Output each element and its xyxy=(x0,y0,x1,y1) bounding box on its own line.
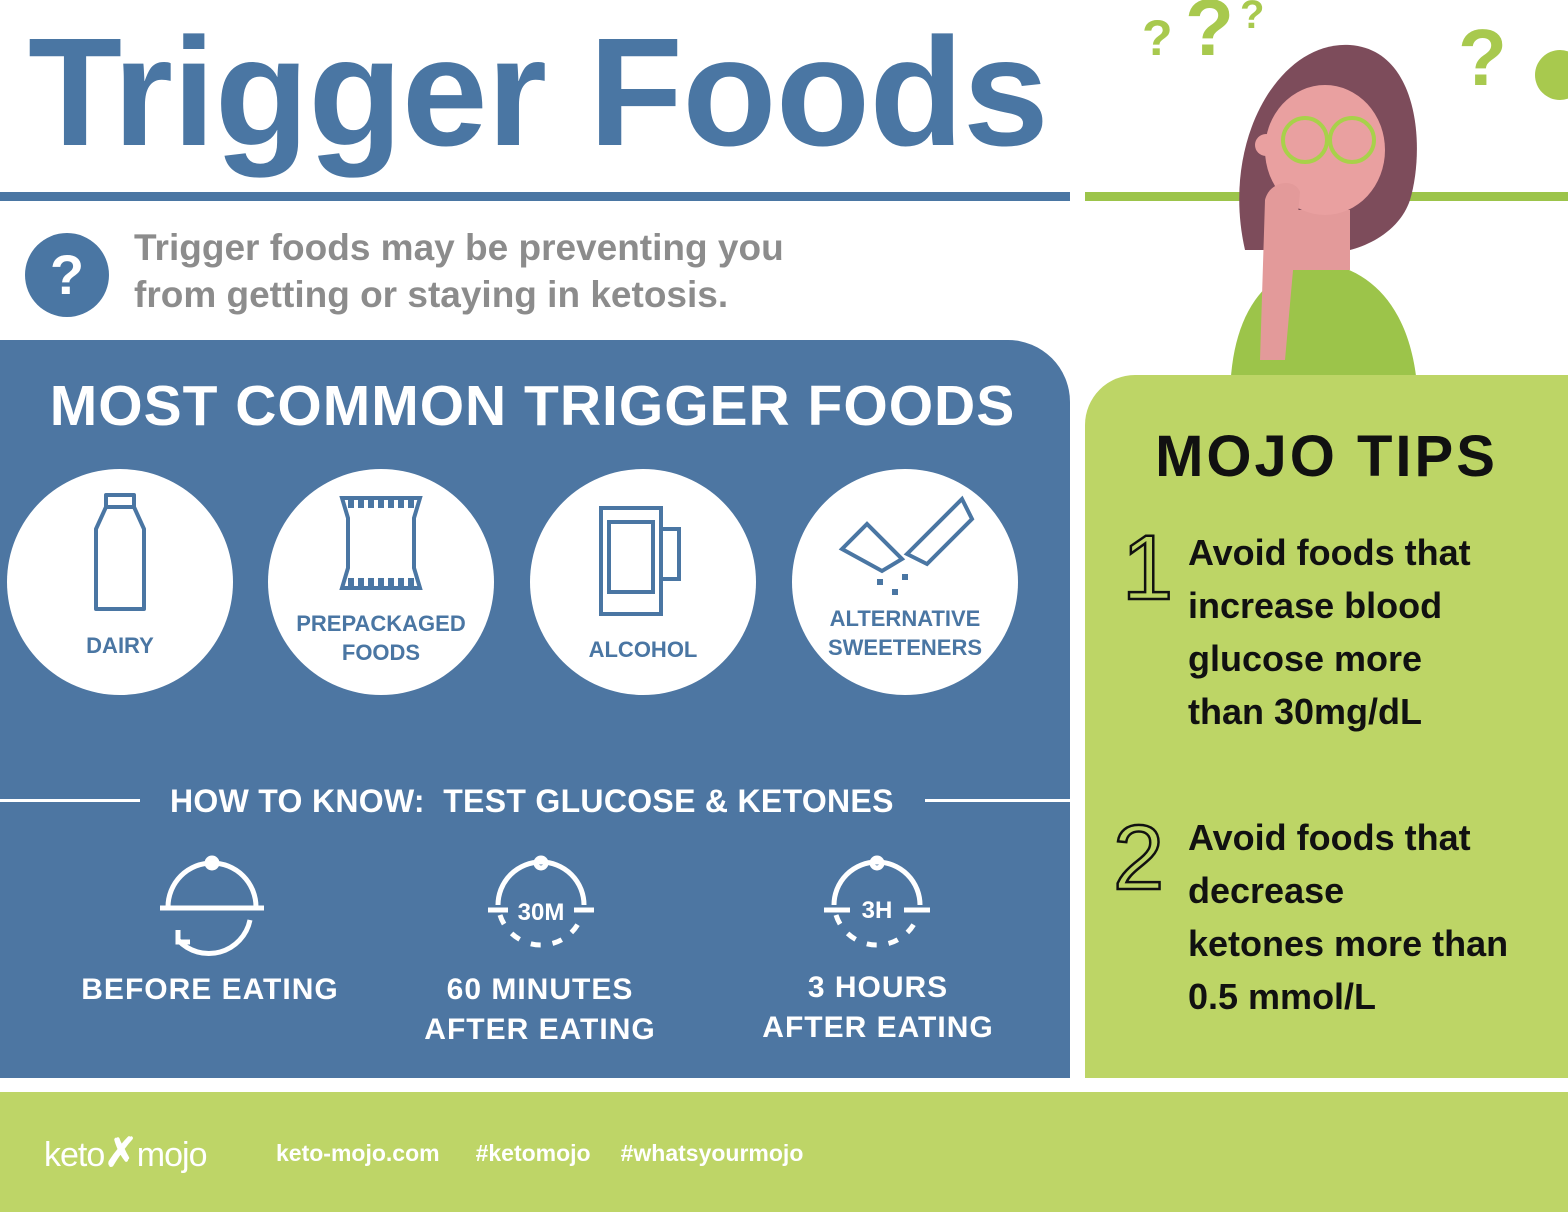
icon: 60 minutes xyxy=(488,856,594,948)
footer xyxy=(0,1092,1568,1212)
icon: dairy: DAIRY xyxy=(86,633,154,658)
icon: sweeteners: ALTERNATIVE xyxy=(830,606,980,631)
tip 2: ketones more than xyxy=(1188,923,1508,964)
how to know heading xyxy=(0,783,1070,819)
icon: alcohol xyxy=(530,469,756,695)
text: AFTER EATING xyxy=(762,1011,994,1044)
icon: sweeteners xyxy=(792,469,1018,695)
tip 2 xyxy=(1188,817,1508,1017)
icon: prepackaged xyxy=(268,469,494,695)
icon: dairy xyxy=(7,469,233,695)
text: BEFORE EATING xyxy=(81,973,339,1006)
icon: question circle xyxy=(25,233,109,317)
tip 2: Avoid foods that xyxy=(1188,817,1471,858)
heading: MOST COMMON TRIGGER FOODS xyxy=(50,374,1015,438)
icon: 3 hours xyxy=(824,856,930,948)
tip 1 xyxy=(1188,532,1471,732)
icon: prepackaged: FOODS xyxy=(342,640,420,665)
woman illustration: ? xyxy=(1142,10,1173,66)
icon: alcohol: ALCOHOL xyxy=(589,637,697,662)
how to know heading: HOW TO KNOW: TEST GLUCOSE & KETONES xyxy=(170,783,894,819)
intro text: from getting or staying in ketosis. xyxy=(134,274,728,315)
tip 1: increase blood xyxy=(1188,585,1442,626)
tip 1: glucose more xyxy=(1188,638,1422,679)
title: Trigger Foods xyxy=(28,6,1048,178)
links: keto-mojo.com #ketomojo #whatsyourmojo xyxy=(276,1140,803,1166)
text: AFTER EATING xyxy=(424,1013,656,1046)
intro text xyxy=(134,227,784,315)
panel: trigger foods xyxy=(0,340,1070,1078)
panel: mojo tips xyxy=(1085,375,1568,1078)
tip 2: 0.5 mmol/L xyxy=(1188,976,1376,1017)
heading: mojo tips: MOJO TIPS xyxy=(1155,424,1498,489)
intro text: Trigger foods may be preventing you xyxy=(134,227,784,268)
tip 2: decrease xyxy=(1188,870,1344,911)
text: 3 HOURS xyxy=(808,971,948,1004)
icon: prepackaged: PREPACKAGED xyxy=(296,611,466,636)
icon: before eating xyxy=(160,856,264,956)
tip 2 number: 2 xyxy=(1113,807,1164,909)
text: 60 MINUTES xyxy=(447,973,633,1006)
logo: keto✗mojo xyxy=(44,1131,206,1175)
woman illustration xyxy=(1085,0,1568,375)
icon: question circle: ? xyxy=(50,243,84,306)
woman illustration: ? xyxy=(1458,13,1507,102)
icon: 60 minutes: 30M xyxy=(518,899,564,926)
tip 1 number: 1 xyxy=(1122,517,1173,619)
tip 1: than 30mg/dL xyxy=(1188,691,1422,732)
icon: 3 hours: 3H xyxy=(862,897,892,924)
tip 1: Avoid foods that xyxy=(1188,532,1471,573)
icon: sweeteners: SWEETENERS xyxy=(828,635,982,660)
